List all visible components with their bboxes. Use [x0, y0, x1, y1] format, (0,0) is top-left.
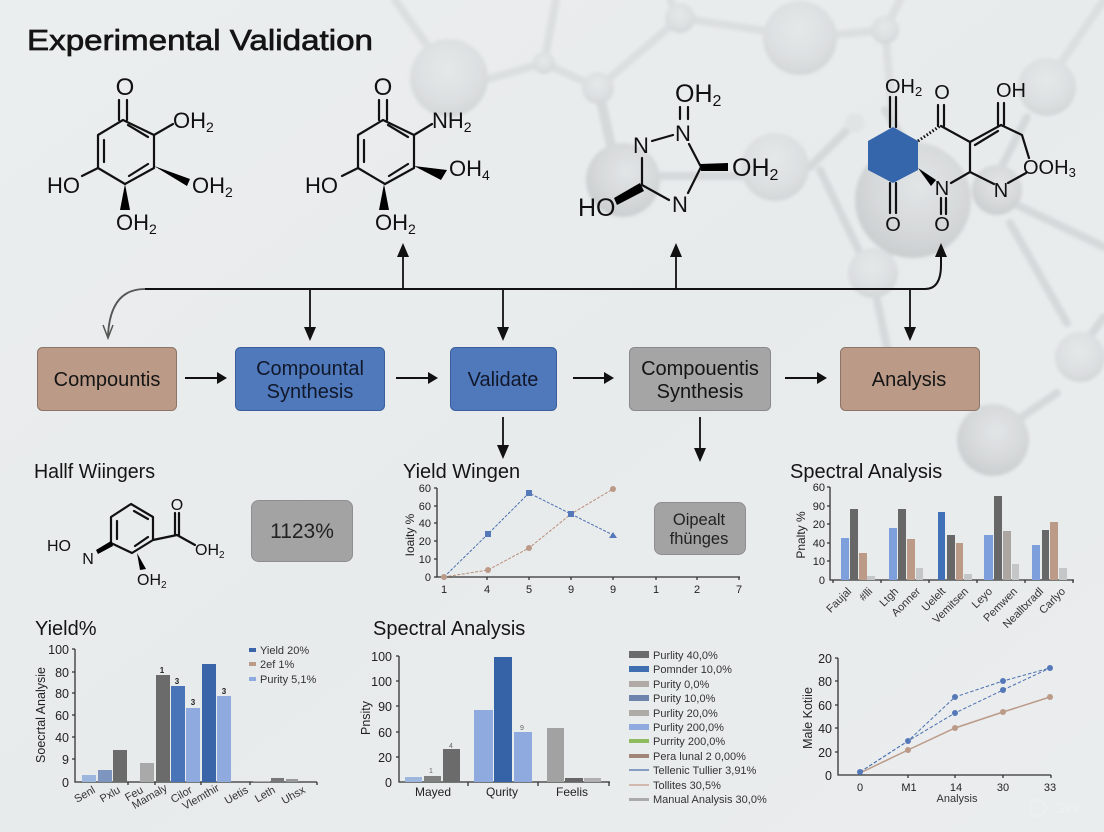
callout box: Dipealt thunges: [654, 502, 746, 554]
faint watermark: [1030, 800, 1079, 816]
chemical structure 2: 2: [408, 221, 416, 237]
bar chart: yield percent: 3: [175, 677, 180, 686]
line chart: yield: 1: [441, 584, 447, 596]
bar chart: spectral top right: Ltgh: [877, 586, 901, 609]
small chemical structure: 2: [219, 550, 225, 561]
callout box: Dipealt thunges: Oipealt: [673, 511, 726, 529]
small chemical structure: 2: [161, 580, 167, 591]
stat box: 1123%: [252, 500, 352, 562]
line chart: yield: 9: [610, 584, 616, 596]
bar chart: yield percent: 60: [55, 709, 69, 723]
bar chart: spectral top right: Nealltxradl: [1001, 586, 1046, 631]
chemical structure 1: HO: [47, 173, 80, 198]
chemical structure 4: OH: [885, 76, 915, 98]
bar chart: spectral top right: 60: [813, 482, 825, 494]
bar chart: yield percent: 9: [62, 753, 69, 767]
workflow box: Analysis: Analysis: [872, 369, 946, 391]
title: Experimental Validation: [27, 25, 373, 57]
line chart: analysis bottom right: 20: [818, 746, 832, 760]
workflow box: Validate: Validate: [468, 369, 538, 391]
legend: Purity 10,0%: [653, 693, 716, 705]
bar chart: spectral bottom centre: Feelis: [556, 785, 588, 799]
chemical structure 1: OH: [116, 210, 149, 235]
bar chart: spectral top right: Aonner: [890, 585, 923, 619]
line chart: yield: 4: [484, 584, 490, 596]
blue ring: [868, 127, 918, 183]
bar chart: spectral top right: Faujal: [824, 586, 854, 615]
chemical structure 3: N: [672, 192, 688, 217]
bar chart: spectral top right: Leyo: [970, 586, 995, 611]
legend: Tollites 30,5%: [653, 780, 721, 792]
chemical structure 3: 2: [712, 93, 722, 110]
small chemical structure: OH: [137, 572, 161, 589]
bar chart: yield percent: 100: [48, 643, 69, 657]
bar chart: spectral top right: Carlyo: [1037, 586, 1068, 617]
workflow box: Compountal Synthesis: Synthesis: [267, 381, 353, 403]
bar chart: yield percent: Mamaly: [130, 782, 170, 812]
chemical structure 1: 2: [149, 221, 157, 237]
legend: Purlity 200,0%: [653, 722, 724, 734]
line chart: analysis bottom right: Analysis: [937, 793, 978, 805]
legend: Manual Analysis 30,0%: [653, 794, 767, 806]
bar chart: spectral bottom centre: 0: [385, 776, 392, 790]
bar chart: spectral top right: Pemwen: [981, 586, 1020, 624]
line chart: yield: 20: [419, 536, 431, 548]
stat box: 1123%: 1123%: [270, 520, 334, 543]
line chart: analysis bottom right: 33: [1044, 782, 1056, 794]
bar chart: spectral top right: 0: [819, 575, 825, 587]
legend: Yield 20%: [260, 645, 309, 657]
chemical structure 2: OH: [449, 156, 482, 181]
line chart: analysis bottom right: 60: [818, 699, 832, 713]
workflow box: Compountal Synthesis: [236, 348, 384, 410]
line chart: yield: 40: [419, 518, 431, 530]
chemical structure 2: OH: [375, 210, 408, 235]
chemical structure 2: [305, 74, 490, 237]
line chart: yield: 2: [694, 584, 700, 596]
heading: Yield Wingen: Yield Wingen: [403, 461, 520, 483]
line chart: yield: 5: [526, 584, 532, 596]
bar chart: yield percent: Feu: [123, 784, 146, 804]
bar chart: spectral bottom centre: 1: [429, 768, 433, 775]
chemical structure 4: O: [885, 214, 901, 236]
chemical structure 1: O: [116, 74, 134, 101]
bar chart: spectral top right: #lli: [857, 586, 875, 604]
heading: Spectral Analysis (bottom centre): Spectral Analysis: [373, 618, 525, 640]
legend: [629, 650, 767, 806]
chemical structure 2: NH: [432, 108, 464, 133]
bar chart: yield percent: Leth: [253, 784, 278, 805]
chemical structure 2: HO: [305, 173, 338, 198]
heading: Yield%: Yield%: [35, 618, 97, 640]
line chart: yield: 7: [736, 584, 742, 596]
small chemical structure: [47, 497, 225, 591]
legend: Tellenic Tullier 3,91%: [653, 765, 757, 777]
bar chart: yield percent: 0: [62, 776, 69, 790]
bar chart: spectral top right: 90: [813, 501, 825, 513]
line chart: analysis bottom right: 20: [818, 652, 832, 666]
bar chart: spectral bottom centre: 100: [371, 675, 392, 689]
legend: Purlity 40,0%: [653, 650, 718, 662]
chemical structure 4: OOH: [1023, 157, 1069, 179]
bar chart: spectral top right: Pnalty %: [794, 511, 808, 559]
chemical structure 3: OH: [675, 80, 712, 108]
bar chart: spectral bottom centre: 100: [371, 650, 392, 664]
line chart: yield: 10: [419, 554, 431, 566]
bar chart: yield percent: 1: [160, 666, 165, 675]
small chemical structure: HO: [47, 538, 71, 555]
line chart: analysis bottom right: 80: [818, 675, 832, 689]
line chart: yield: 1: [653, 584, 659, 596]
bar chart: yield percent: Uhsx: [280, 784, 308, 807]
line chart: analysis bottom right: 14: [950, 782, 962, 794]
bar chart: yield percent: 40: [55, 731, 69, 745]
chemical structure 2: 2: [464, 119, 472, 135]
line chart: yield: [403, 483, 742, 596]
chemical structure 4: N: [935, 178, 949, 200]
bar chart: spectral bottom centre: 4: [449, 743, 453, 750]
workflow box: Compouentis Synthesis: Synthesis: [657, 381, 743, 403]
small chemical structure: O: [171, 497, 183, 514]
bar chart: spectral top right: Uelelt: [920, 586, 948, 614]
bar chart: yield percent: 80: [55, 666, 69, 680]
chemical structure 4: 2: [915, 84, 922, 99]
workflow connector lines and arrows: [103, 243, 947, 462]
bar chart: yield percent: 3: [222, 687, 227, 696]
bar chart: yield percent: Uetis: [223, 784, 251, 807]
workflow box: Compountal Synthesis: Compountal: [256, 358, 364, 380]
legend: Purrity 200,0%: [653, 736, 725, 748]
bar chart: spectral top right: Vemitsen: [931, 586, 971, 626]
heading: Spectral Analysis (top right): Spectral Analysis: [790, 461, 942, 483]
workflow box: Validate: [450, 348, 556, 410]
bar chart: spectral bottom centre: 20: [378, 751, 392, 765]
heading: Hallf Wiingers: Hallf Wiingers: [34, 461, 155, 483]
bar chart: spectral bottom centre: Mayed: [415, 785, 451, 799]
legend: Pera lunal 2 0,00%: [653, 751, 746, 763]
bar chart: spectral bottom centre: Qurity: [486, 785, 518, 799]
chemical structure 1: [47, 74, 233, 237]
chemical structure 4: 3: [1069, 165, 1076, 180]
bar chart: spectral top right: 20: [813, 519, 825, 531]
bar chart: spectral top right: 40: [813, 538, 825, 550]
bar chart: spectral bottom centre: 90: [378, 700, 392, 714]
chemical structure 3: [578, 80, 778, 222]
bar chart: spectral bottom centre: [359, 650, 767, 806]
legend: [249, 645, 316, 686]
line chart: analysis bottom right: 40: [818, 722, 832, 736]
line chart: analysis bottom right: 30: [997, 782, 1009, 794]
bar chart: yield percent: Senl: [72, 784, 98, 806]
chemical structure 4: O: [934, 214, 950, 236]
line chart: yield: Ioaity %: [403, 513, 417, 556]
chemical structure 2: 4: [482, 167, 490, 183]
bar chart: spectral bottom centre: 60: [378, 726, 392, 740]
small chemical structure: OH: [195, 542, 219, 559]
background molecule illustration: [395, 0, 1104, 476]
chemical structure 4: OH: [996, 80, 1026, 102]
legend: 2ef 1%: [260, 659, 294, 671]
legend: Purlity 20,0%: [653, 708, 718, 720]
line chart: analysis bottom right: 0: [825, 769, 832, 783]
chemical structure 1: 2: [206, 119, 214, 135]
faint watermark: Gxx: [1054, 800, 1079, 816]
chemical structure 1: OH: [173, 108, 206, 133]
chemical structure 4: O: [934, 82, 950, 104]
bar chart: spectral bottom centre: Pnsity: [359, 700, 373, 735]
legend: Purity 5,1%: [260, 674, 316, 686]
chemical structure 1: OH: [192, 173, 225, 198]
chemical structure 3: N: [675, 121, 691, 146]
line chart: analysis bottom right: 0: [857, 782, 863, 794]
workflow box: Compountis: [38, 348, 176, 410]
line chart: yield: 0: [425, 572, 431, 584]
chemical structure 3: OH: [732, 154, 770, 182]
bar chart: spectral top right: [794, 482, 1074, 631]
small chemical structure: N: [82, 551, 94, 568]
chemical structure 1: 2: [225, 184, 233, 200]
bar chart: yield percent: Pxlu: [98, 784, 122, 805]
bar chart: yield percent: 3: [191, 698, 196, 707]
chemical structure 4: [868, 76, 1076, 236]
bar chart: yield percent: Vlemthir: [181, 782, 222, 813]
line chart: analysis bottom right: M1: [901, 782, 917, 794]
chemical structure 3: N: [633, 133, 649, 158]
workflow box: Analysis: [840, 348, 980, 410]
bar chart: yield percent: Cilor: [169, 784, 195, 806]
chemical structure 2: O: [374, 74, 392, 101]
workflow box: Compouentis Synthesis: Compouentis: [641, 358, 759, 380]
bar chart: spectral top right: 10: [813, 556, 825, 568]
workflow box: Compouentis Synthesis: [630, 348, 770, 410]
legend: Pomnder 10,0%: [653, 664, 732, 676]
line chart: analysis bottom right: [801, 652, 1056, 805]
bar chart: yield percent: Soecrtal Analysie: [34, 667, 48, 763]
line chart: yield: 60: [419, 483, 431, 495]
line chart: yield: 9: [568, 584, 574, 596]
bar chart: yield percent: 80: [55, 687, 69, 701]
bar chart: yield percent: [34, 643, 317, 813]
legend: Purity 0,0%: [653, 679, 709, 691]
callout box: Dipealt thunges: fhünges: [670, 530, 728, 548]
chemical structure 4: N: [994, 180, 1008, 202]
chemical structure 3: HO: [578, 194, 616, 222]
bar chart: spectral bottom centre: 9: [520, 725, 524, 732]
chemical structure 3: 2: [770, 167, 778, 184]
line chart: yield: 60: [419, 501, 431, 513]
line chart: analysis bottom right: Male Kotiie: [801, 687, 815, 749]
workflow box: Compountis: Compountis: [54, 369, 160, 391]
